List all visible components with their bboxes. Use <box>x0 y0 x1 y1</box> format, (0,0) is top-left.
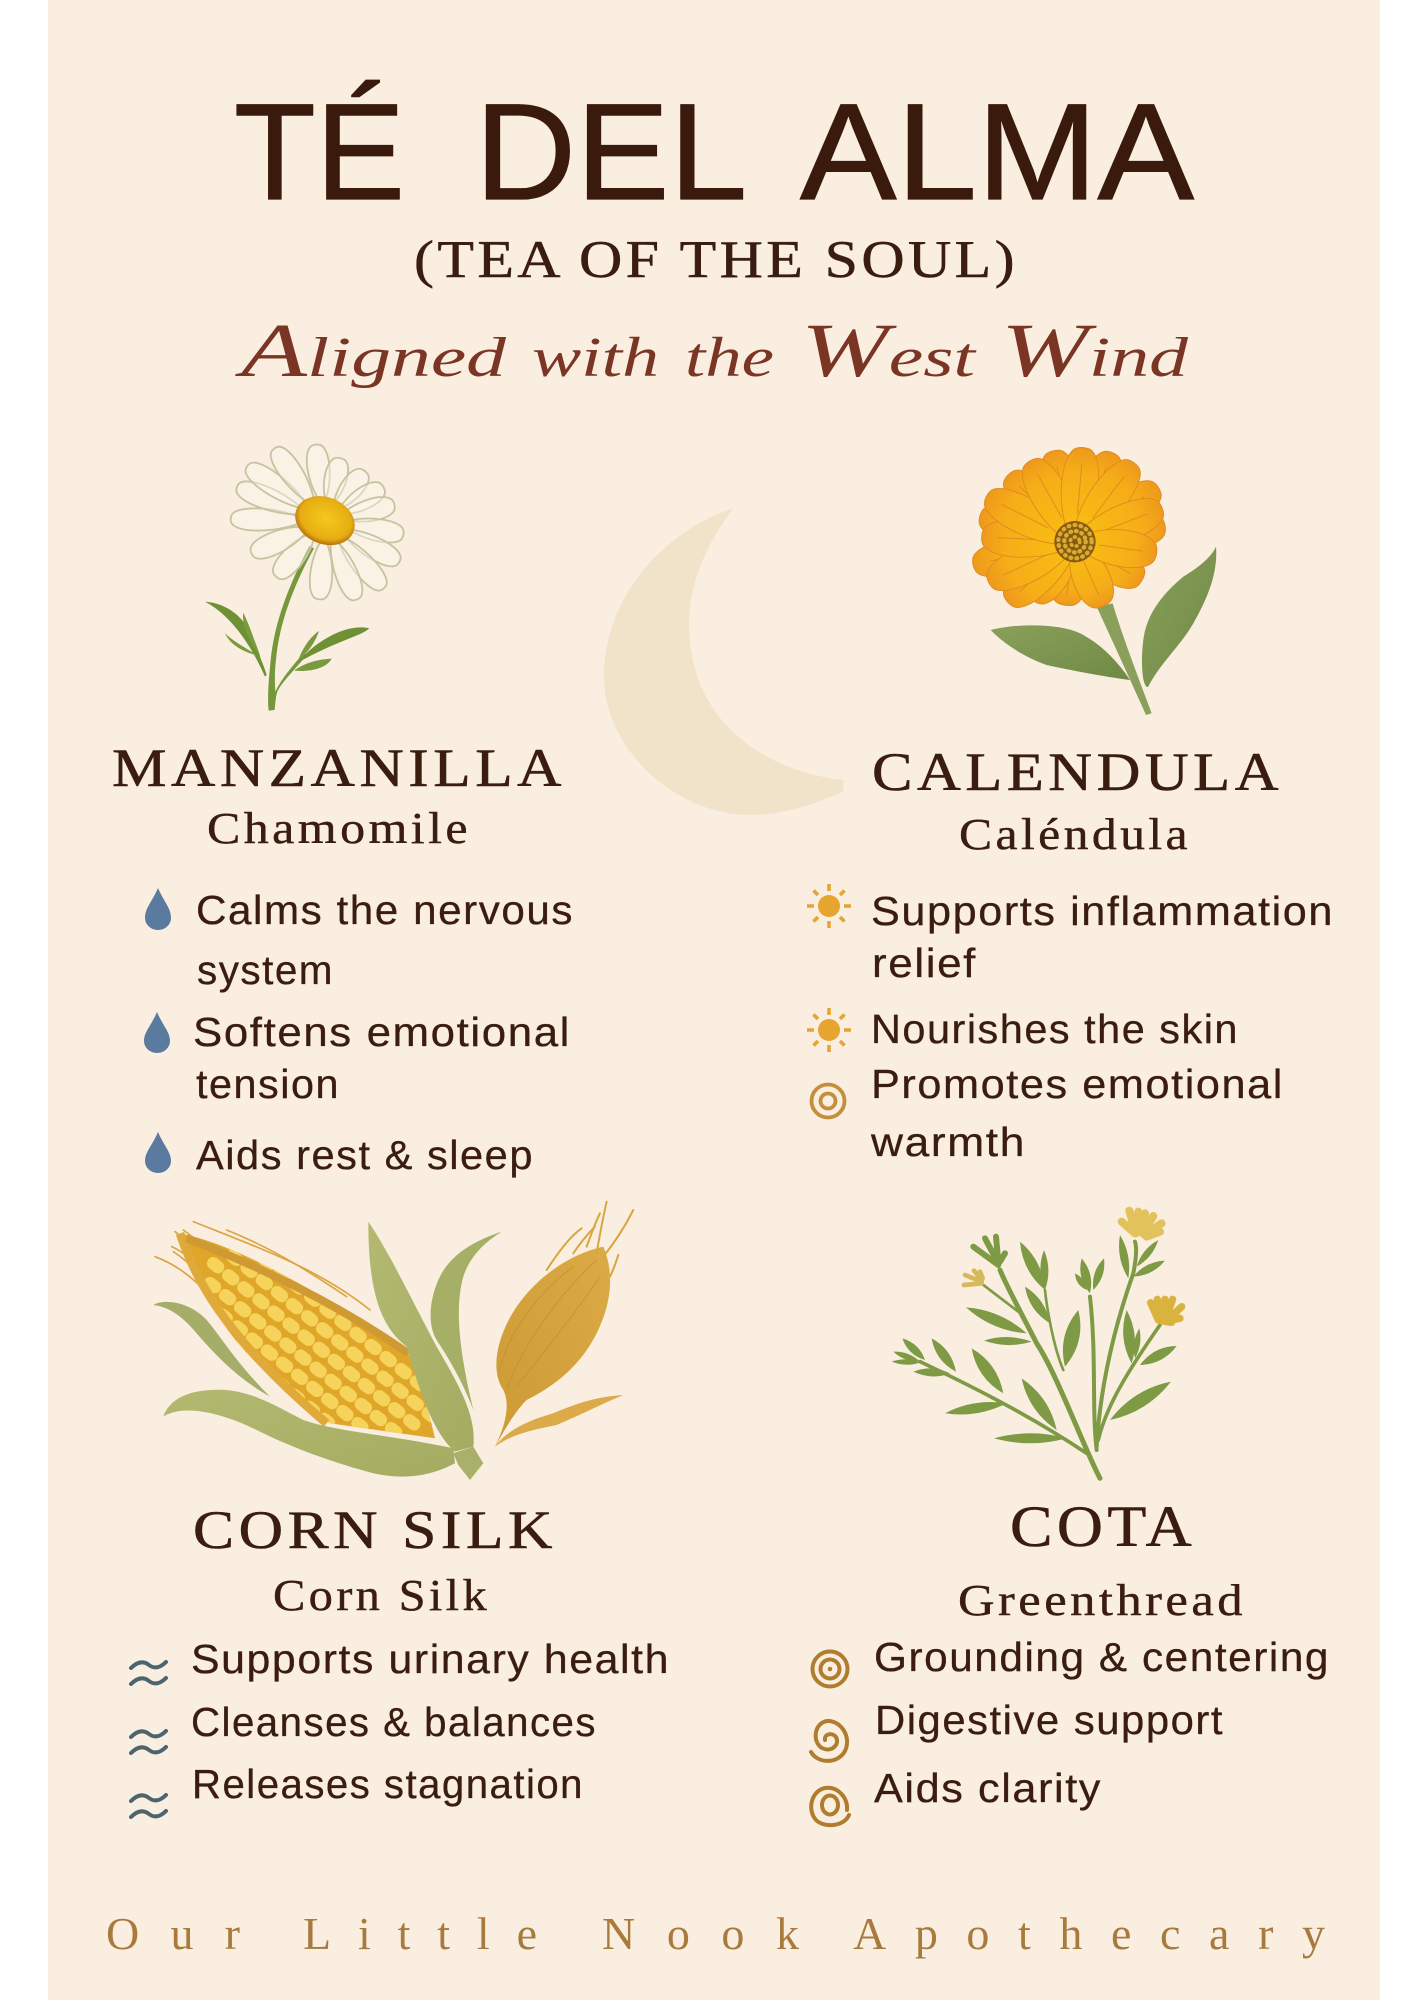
icon: crescent moon <box>604 508 843 815</box>
heading: corn silk: CORN SILK <box>193 1500 557 1560</box>
benefit: grounding and centering: Grounding & centering <box>874 1634 1330 1680</box>
illustration: calendula flower <box>969 446 1216 715</box>
icon: water drop 1 <box>145 888 171 930</box>
benefit: calms the nervous system: system <box>197 947 334 993</box>
subheading: corn silk: Corn Silk <box>273 1571 490 1620</box>
icon: waves 3 <box>131 1795 166 1817</box>
tagline: W ind <box>1001 309 1160 393</box>
benefit: aids rest and sleep: Aids rest & sleep <box>196 1132 534 1178</box>
icon: waves 1 <box>131 1662 166 1684</box>
title: ALMA <box>800 76 1195 229</box>
icon: sun 2 <box>807 1008 851 1052</box>
subtitle: (TEA OF THE SOUL) <box>414 231 1018 289</box>
heading: manzanilla: MANZANILLA <box>112 738 566 798</box>
benefit: digestive support: Digestive support <box>875 1697 1224 1743</box>
icon: water drop 2 <box>144 1012 170 1053</box>
benefit: promotes emotional warmth: warmth <box>870 1119 1026 1165</box>
icon: spiral <box>811 1721 847 1761</box>
illustration: corn cob and silk <box>153 1202 633 1498</box>
benefit: supports inflammation relief: Supports inflammation <box>871 888 1334 934</box>
icon: rings with dot <box>812 1652 848 1686</box>
footer: brand name: Nook <box>602 1908 799 1959</box>
panel: corn silk <box>131 1202 670 1817</box>
tagline: W est <box>801 309 951 393</box>
tagline: the <box>685 327 774 389</box>
benefit: releases stagnation: Releases stagnation <box>192 1761 584 1807</box>
benefit: supports urinary health: Supports urinary health <box>191 1636 670 1682</box>
benefit: nourishes the skin: Nourishes the skin <box>871 1006 1239 1052</box>
footer: brand name: Apothecary <box>853 1908 1325 1959</box>
title: TÉ <box>234 76 405 229</box>
benefit: supports inflammation relief: relief <box>872 940 977 986</box>
icon: waves 2 <box>131 1731 166 1753</box>
footer: brand name: Our <box>106 1908 240 1959</box>
title: DEL <box>475 76 743 229</box>
tagline: with <box>532 327 659 389</box>
subheading: greenthread: Greenthread <box>958 1576 1246 1625</box>
illustration: greenthread plant <box>892 1211 1182 1478</box>
benefit: softens emotional tension: tension <box>196 1061 340 1107</box>
icon: water drop 3 <box>145 1132 171 1173</box>
subheading: chamomile: Chamomile <box>207 804 471 853</box>
icon: concentric rings <box>812 1084 844 1118</box>
tagline: A ligned <box>241 309 447 393</box>
benefit: cleanses and balances: Cleanses & balances <box>191 1699 597 1745</box>
benefit: promotes emotional warmth: Promotes emotional <box>871 1061 1284 1107</box>
benefit: softens emotional tension: Softens emotional <box>193 1009 571 1055</box>
panel: cota <box>811 1211 1330 1825</box>
panel: manzanilla <box>112 442 574 1178</box>
benefit: aids clarity: Aids clarity <box>874 1765 1102 1811</box>
panel: calendula <box>807 446 1334 1165</box>
subheading: caléndula: Caléndula <box>959 810 1191 859</box>
heading: calendula: CALENDULA <box>872 742 1283 802</box>
icon: open spiral ring <box>811 1788 849 1825</box>
benefit: calms the nervous system: Calms the nervous <box>196 887 574 933</box>
heading: cota: COTA <box>1010 1494 1196 1559</box>
icon: sun 1 <box>807 884 851 928</box>
footer: brand name: Little <box>303 1908 537 1959</box>
illustration: chamomile flower <box>205 442 405 711</box>
